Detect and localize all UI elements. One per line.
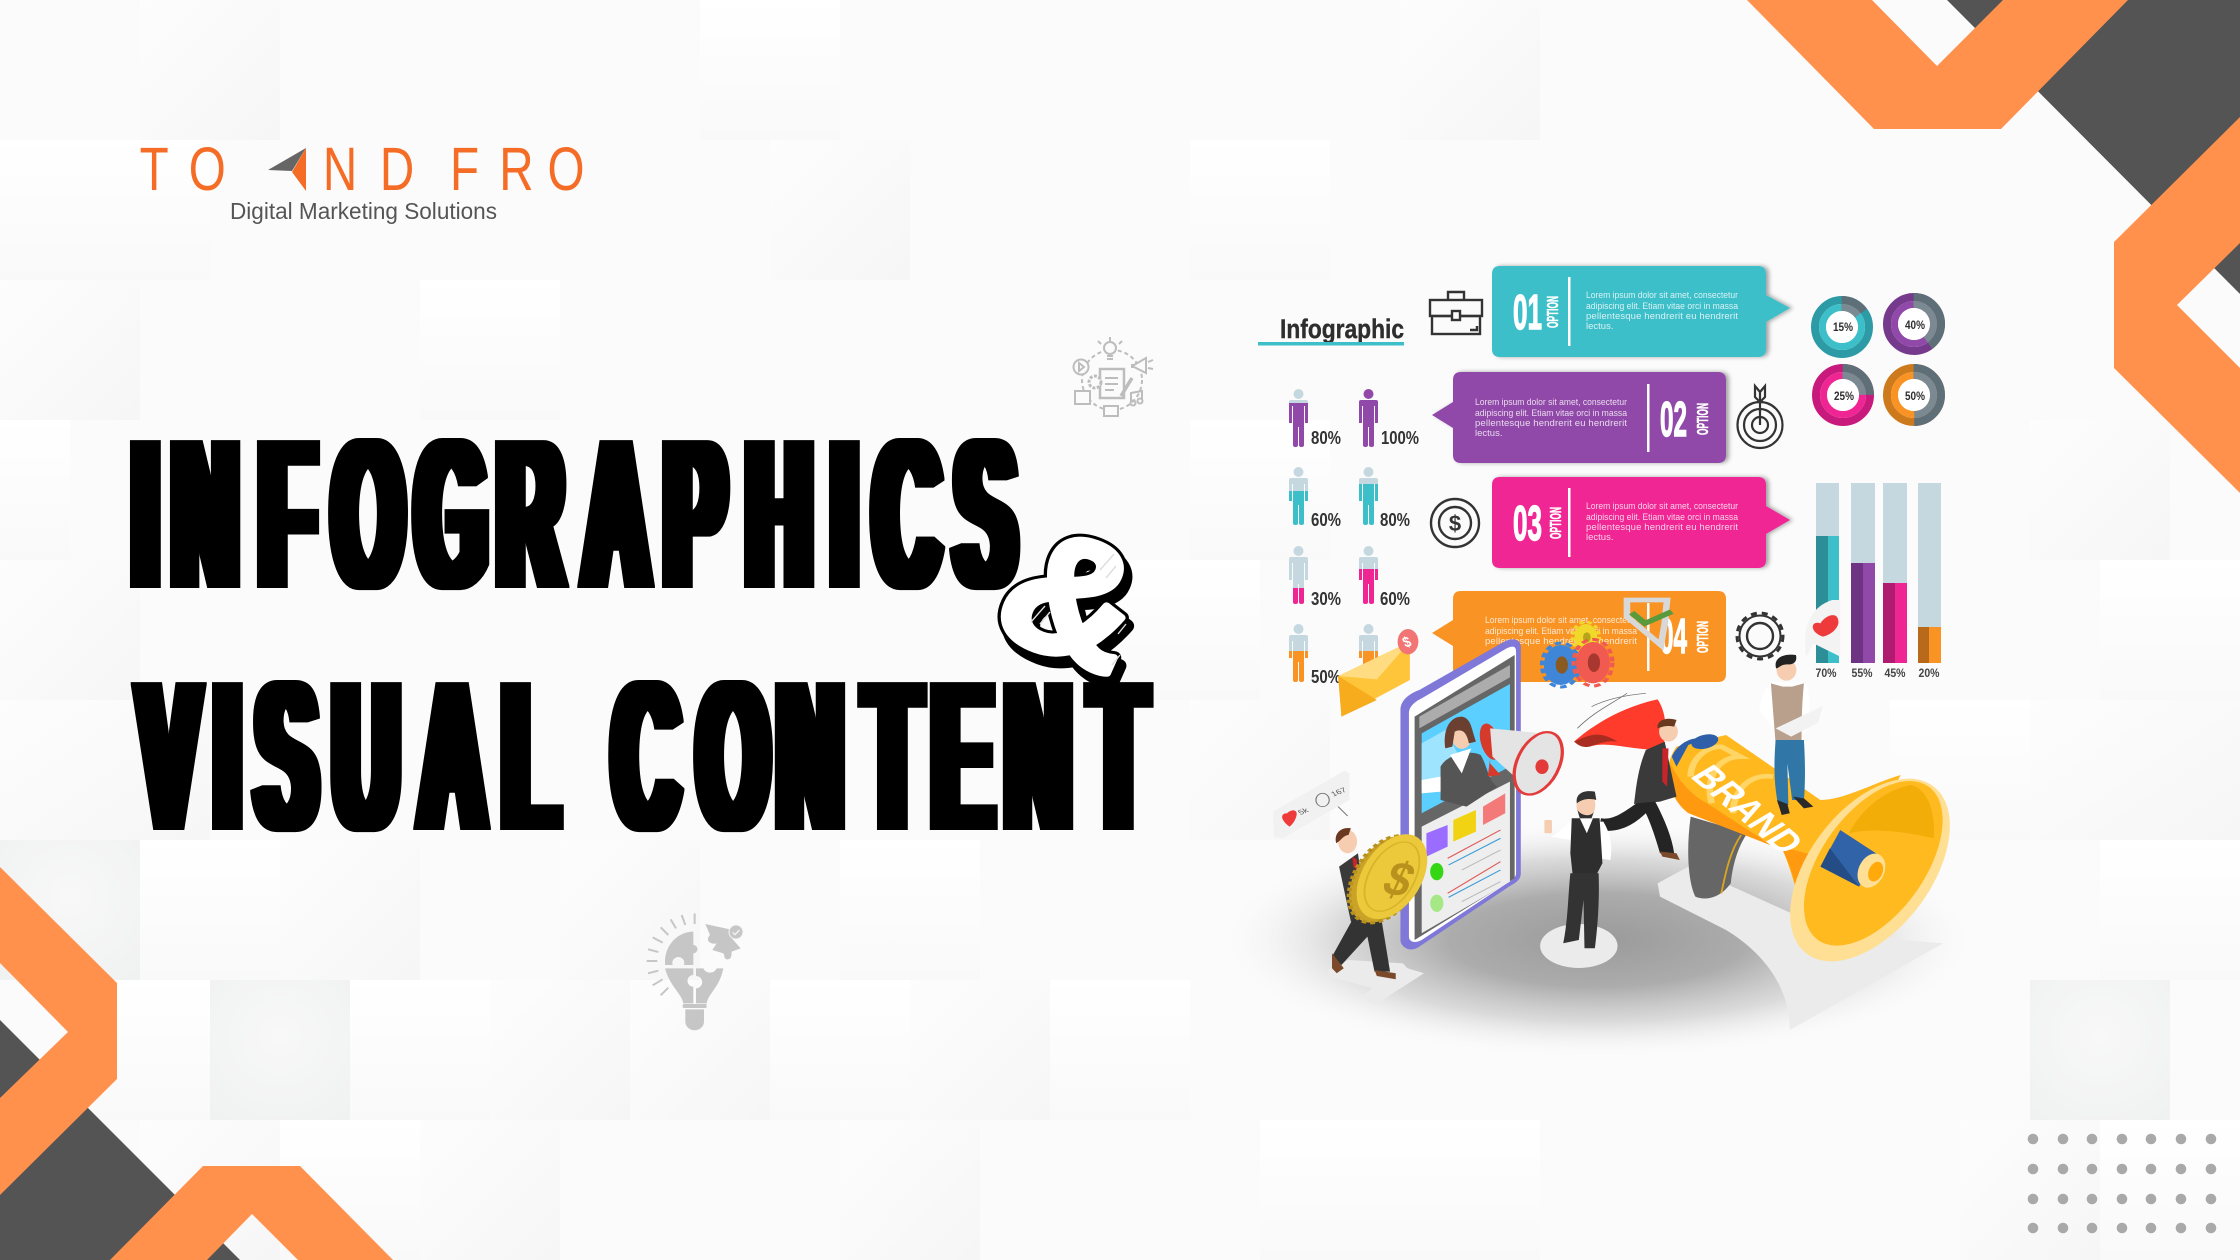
icon: dollar coin: $ — [1449, 511, 1461, 536]
card 02: lectus. — [1475, 428, 1502, 439]
card 01: Lorem ipsum dolor sit amet, consectetur — [1586, 290, 1738, 301]
people percentage labels: 100% — [1381, 428, 1419, 448]
donut labels: 25% — [1834, 389, 1854, 403]
card 01: adipiscing elit. Etiam vitae orci in massa — [1586, 301, 1739, 312]
card 02 — [1432, 372, 1726, 463]
ampersand: & — [972, 487, 1176, 710]
ampersand: & — [977, 495, 1180, 718]
person 80% purple — [1289, 389, 1308, 447]
bar labels: 70% — [1816, 666, 1837, 680]
card 03: OPTION — [1548, 507, 1565, 539]
person orange second — [1359, 624, 1378, 664]
card 03: 03 — [1513, 497, 1542, 551]
social card — [1273, 771, 1349, 838]
card 04: pellentesque hendrerit eu hendrerit — [1485, 636, 1637, 647]
bar labels: 55% — [1852, 666, 1873, 680]
title line 1: INFOGRAPHICS — [133, 397, 1015, 633]
infographic heading: Infographic — [1280, 314, 1404, 344]
megaphone — [1668, 731, 1983, 977]
dot grid — [2028, 1134, 2216, 1233]
person 80% teal — [1359, 467, 1378, 525]
card 03: lectus. — [1586, 532, 1613, 543]
coin dollar sign: $ — [1375, 850, 1424, 908]
yellow gear — [1573, 622, 1599, 653]
people percentage labels: 80% — [1311, 428, 1341, 448]
woman presenter — [1422, 717, 1497, 807]
blue gear — [1542, 643, 1580, 687]
icon: target — [1738, 386, 1782, 448]
person 60% teal — [1289, 467, 1308, 525]
bar chart — [1816, 483, 1941, 680]
person 30% pink — [1289, 546, 1308, 604]
people percentage labels — [1311, 428, 1419, 687]
card 04 — [1432, 591, 1726, 682]
floor cast shapes — [1327, 867, 1943, 1030]
card 04: Lorem ipsum dolor sit amet, consectetur — [1485, 615, 1637, 626]
person 50% orange — [1289, 624, 1308, 682]
donut labels: 40% — [1905, 318, 1925, 332]
card 01: pellentesque hendrerit eu hendrerit — [1586, 311, 1738, 322]
people percentage labels: 30% — [1311, 589, 1341, 609]
card 03 — [1492, 477, 1790, 568]
logo arrow — [268, 148, 306, 191]
people percentage labels: 50% — [1311, 667, 1341, 687]
envelope badge — [1398, 629, 1418, 654]
icon: gear — [1737, 613, 1783, 659]
heart bubble — [1805, 600, 1840, 657]
logo wordmark: TO ND FRO — [140, 134, 585, 203]
megaphone body — [1668, 735, 1901, 953]
running man with cape — [1574, 693, 1680, 860]
standing man with laptop — [1759, 655, 1823, 815]
icon: content marketing cycle — [1074, 337, 1153, 416]
donut labels: 50% — [1905, 389, 1925, 403]
card 02: Lorem ipsum dolor sit amet, consectetur — [1475, 397, 1627, 408]
social card: 167 — [1329, 786, 1349, 798]
infographic panel — [1258, 266, 1941, 687]
people percentage labels: 60% — [1380, 589, 1410, 609]
card 04: OPTION — [1695, 621, 1712, 653]
card 04: adipiscing elit. Etiam vitae orci in massa — [1485, 626, 1638, 637]
megaphone bell — [1757, 763, 1983, 977]
icon: puzzle light bulb — [647, 913, 743, 1030]
check box — [1627, 600, 1672, 645]
handheld megaphone — [1476, 722, 1571, 798]
donut 25% — [1816, 368, 1870, 422]
people percentage labels: 80% — [1380, 510, 1410, 530]
envelope: $ — [1400, 633, 1414, 651]
bar labels: 45% — [1884, 666, 1906, 680]
person 60% pink — [1359, 546, 1378, 604]
megaphone button — [1688, 731, 1722, 752]
ampersand: & — [972, 487, 1176, 710]
donut labels — [1833, 318, 1925, 403]
card 01: lectus. — [1586, 321, 1613, 332]
bar labels: 20% — [1918, 666, 1940, 680]
bar labels — [1816, 666, 1940, 680]
card 01: OPTION — [1545, 296, 1562, 328]
person 100% purple — [1359, 389, 1378, 447]
megaphone driver — [1820, 830, 1877, 887]
card 03: adipiscing elit. Etiam vitae orci in massa — [1586, 512, 1739, 523]
icon: dollar coin — [1431, 499, 1479, 547]
title line 2: VISUAL CONTENT — [139, 639, 1146, 875]
card 02: OPTION — [1695, 403, 1712, 435]
card 02: adipiscing elit. Etiam vitae orci in massa — [1475, 408, 1628, 419]
card 02: 02 — [1660, 393, 1687, 447]
donut charts — [1815, 297, 1941, 422]
corner shapes: bottom left — [0, 867, 393, 1260]
social card: 5k — [1296, 806, 1311, 816]
megaphone rings — [1691, 747, 1773, 813]
corner shapes: top right — [1747, 0, 2240, 493]
people percentage chart — [1289, 389, 1419, 687]
icon: briefcase — [1430, 292, 1482, 334]
envelope — [1338, 629, 1418, 717]
centre man with microphone — [1544, 791, 1611, 948]
logo tagline: Digital Marketing Solutions — [230, 198, 497, 224]
donut 15% — [1815, 300, 1869, 354]
card 02: pellentesque hendrerit eu hendrerit — [1475, 418, 1627, 429]
card 04: 04 — [1660, 610, 1687, 664]
donut labels: 15% — [1833, 320, 1853, 334]
gears — [1542, 622, 1612, 687]
card 01: 01 — [1513, 286, 1542, 340]
floor shadow — [1226, 823, 1971, 1057]
logo — [140, 134, 585, 224]
donut 40% — [1887, 297, 1941, 351]
coin man — [1332, 828, 1441, 979]
donut 50% — [1887, 368, 1941, 422]
brand label: BRAND — [1682, 759, 1813, 860]
phone — [1400, 639, 1521, 949]
card 03: Lorem ipsum dolor sit amet, consectetur — [1586, 501, 1738, 512]
people percentage labels: 60% — [1311, 510, 1341, 530]
megaphone handle — [1688, 817, 1747, 899]
red gear — [1574, 639, 1612, 686]
isometric marketing illustration — [1226, 600, 1983, 1057]
card 01 — [1492, 266, 1790, 357]
card 03: pellentesque hendrerit eu hendrerit — [1586, 522, 1738, 533]
